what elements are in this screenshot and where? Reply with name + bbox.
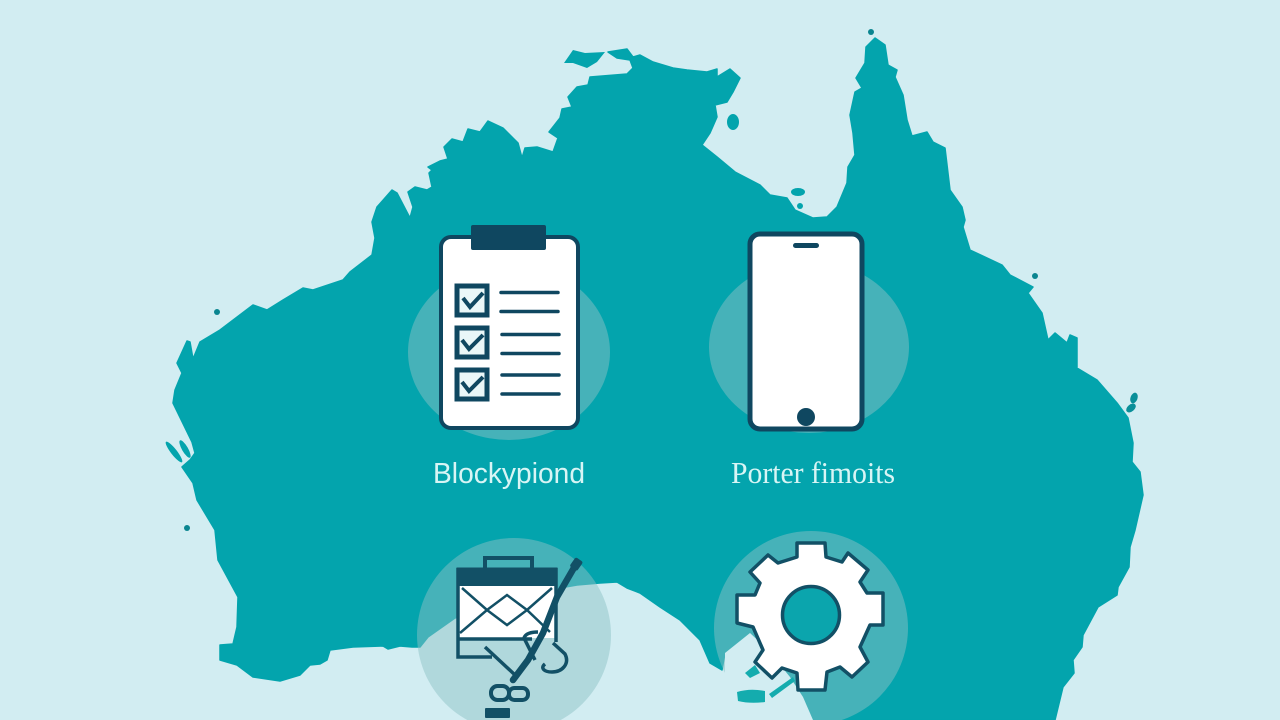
islands xyxy=(564,50,605,68)
label: Porter fimoits: Porter fimoits xyxy=(731,455,895,490)
panel: phone xyxy=(709,234,909,490)
backdrop circle: checklist xyxy=(408,264,610,440)
coastal water patch xyxy=(725,633,813,720)
backdrop circle: mail case xyxy=(417,538,611,720)
icon: briefcase with envelope and tool xyxy=(457,557,583,718)
islands: Tasmania fragments xyxy=(737,665,795,703)
label: Blockypiond: Blockypiond xyxy=(433,458,585,490)
backdrop circle: settings xyxy=(714,531,908,720)
backdrop circle: phone xyxy=(709,261,909,433)
icon: clipboard xyxy=(441,225,578,428)
gear hole xyxy=(782,586,840,644)
panel: mail case xyxy=(417,538,611,720)
panel: settings xyxy=(714,531,908,720)
map of Australia xyxy=(164,29,1143,720)
icon: smartphone xyxy=(750,234,862,429)
panel: checklist xyxy=(408,225,610,490)
icon: gear xyxy=(737,543,883,690)
